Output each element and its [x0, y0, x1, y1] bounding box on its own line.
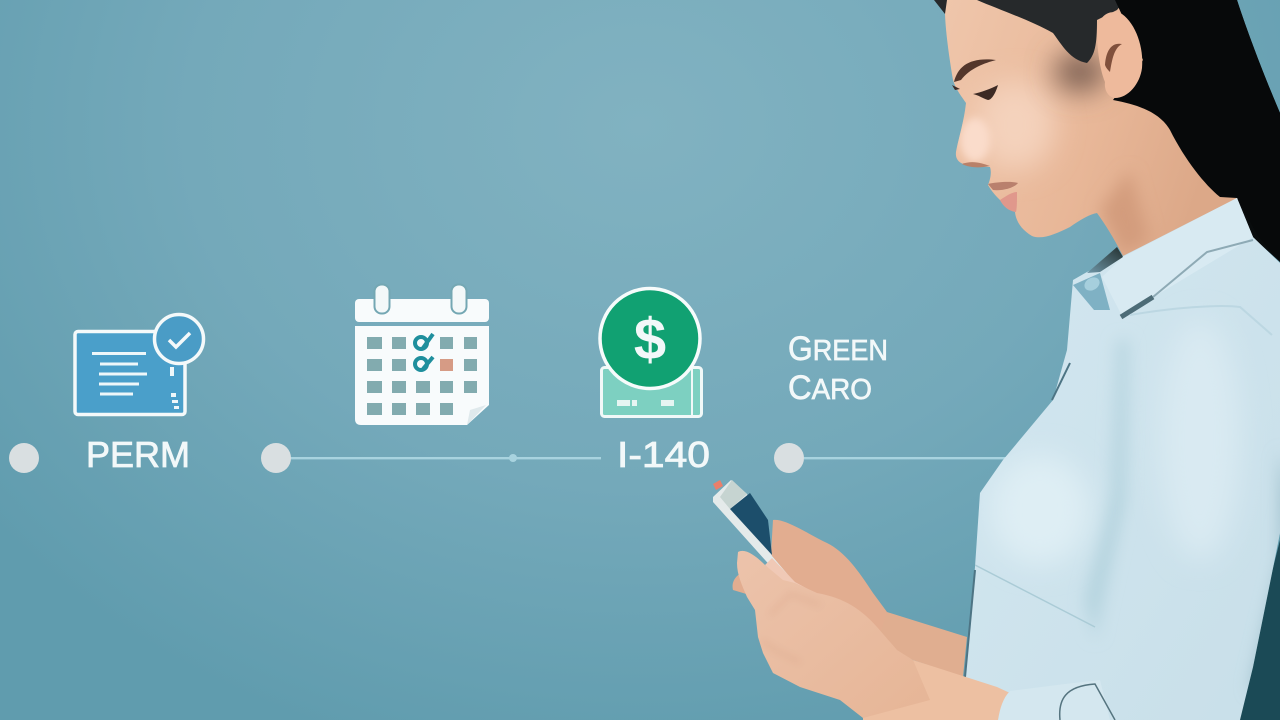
woman — [713, 0, 1280, 720]
back hand — [733, 520, 887, 650]
timeline line: second segment — [804, 457, 1008, 459]
timeline midpoint dot — [509, 454, 517, 462]
shirt cuff — [998, 680, 1110, 720]
shirt front edges — [1052, 363, 1070, 400]
icon: calendar — [355, 284, 489, 425]
collar shadow — [1121, 297, 1153, 317]
label: I-140: I-140 — [617, 434, 710, 475]
eyebrow — [954, 59, 996, 82]
woman: dark background corner behind her — [1235, 540, 1280, 720]
front forearm — [863, 650, 1010, 720]
nostril shadow — [962, 162, 990, 167]
back forearm — [870, 612, 967, 677]
shoulder seam — [1130, 306, 1272, 335]
shirt hem edge — [965, 570, 975, 677]
icon: green dollar coin on card: $ — [634, 307, 666, 372]
label: Green Caro: GREEN — [788, 330, 888, 368]
label: Green Caro — [788, 330, 888, 407]
front hand — [737, 551, 930, 718]
phone — [713, 480, 815, 593]
timeline node 3 — [774, 443, 804, 473]
ear — [1097, 12, 1142, 98]
icon: green dollar coin on card — [600, 288, 702, 416]
collar — [1102, 198, 1253, 316]
timeline — [9, 443, 1008, 473]
timeline node 1 — [9, 443, 39, 473]
label: Green Caro: CARO — [788, 369, 872, 407]
eye — [952, 85, 998, 100]
knuckle shading — [762, 594, 820, 662]
hair side — [1113, 0, 1280, 262]
icon: PERM document with check badge — [75, 314, 204, 414]
timeline line: first segment — [290, 457, 601, 459]
timeline node 2 — [261, 443, 291, 473]
shirt inner collar — [1087, 247, 1123, 273]
face and neck — [945, 0, 1240, 256]
shirt placket — [1073, 273, 1110, 310]
shirt — [965, 198, 1280, 720]
lips — [988, 182, 1018, 190]
collar under-line — [1153, 240, 1253, 297]
hair top — [934, 0, 1125, 63]
hair behind neck — [1120, 0, 1280, 262]
label: PERM: PERM — [86, 434, 190, 475]
